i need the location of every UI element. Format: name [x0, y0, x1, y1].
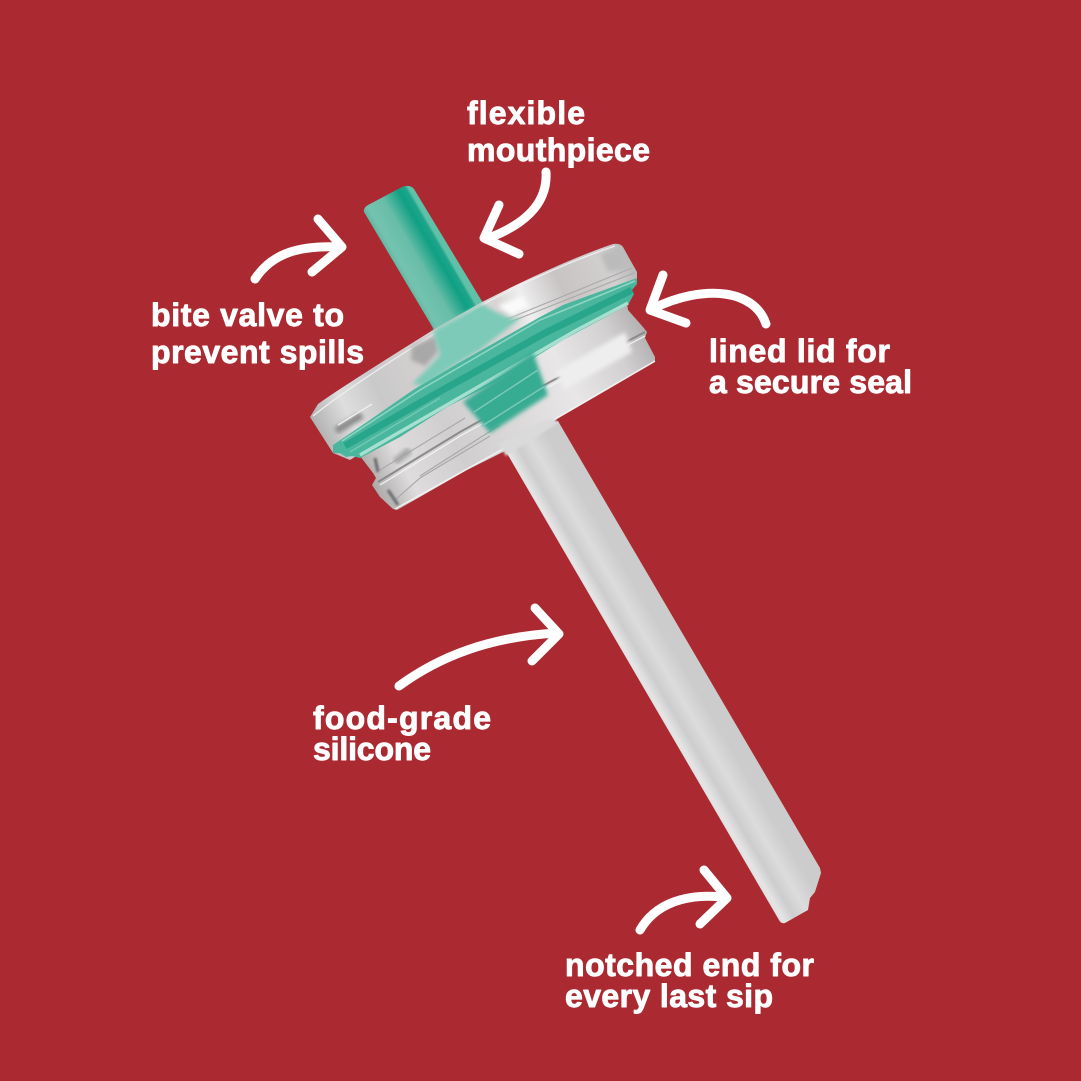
label [565, 947, 814, 1014]
label [467, 95, 650, 168]
label: silicone [313, 731, 431, 767]
label [151, 297, 364, 370]
lower patch highlights [474, 370, 545, 426]
callout: lined lid [650, 275, 912, 400]
callout: food-grade silicone [313, 608, 559, 767]
arrow [484, 172, 546, 254]
callout: notched end [565, 870, 814, 1014]
arrow [255, 219, 342, 279]
upper teal patch [412, 304, 522, 386]
arrow [650, 275, 766, 324]
straw collar [499, 419, 558, 456]
lid cap [310, 244, 637, 460]
teal liner band [333, 278, 637, 458]
label [313, 700, 491, 767]
label: flexible [467, 95, 585, 131]
arrow [640, 870, 727, 930]
silicone straw [505, 421, 821, 923]
label [709, 333, 912, 400]
product: straw lid assembly [310, 186, 821, 923]
label: a secure seal [709, 364, 912, 400]
lower teal patch [463, 352, 548, 433]
lid body details [375, 332, 655, 509]
lid lower threaded body [360, 290, 655, 510]
label: every last sip [565, 978, 773, 1014]
label: prevent spills [151, 334, 364, 370]
callout: flexible mouthpiece [467, 95, 650, 254]
label: bite valve to [151, 297, 344, 333]
label: lined lid for [709, 333, 890, 369]
liner band shading [342, 281, 635, 455]
label: notched end for [565, 947, 814, 983]
teal mouthpiece [364, 186, 490, 345]
label: mouthpiece [467, 132, 650, 168]
arrow [399, 608, 559, 686]
label: food-grade [313, 700, 491, 736]
callout: bite valve [151, 219, 364, 370]
lid cap details [313, 246, 634, 431]
